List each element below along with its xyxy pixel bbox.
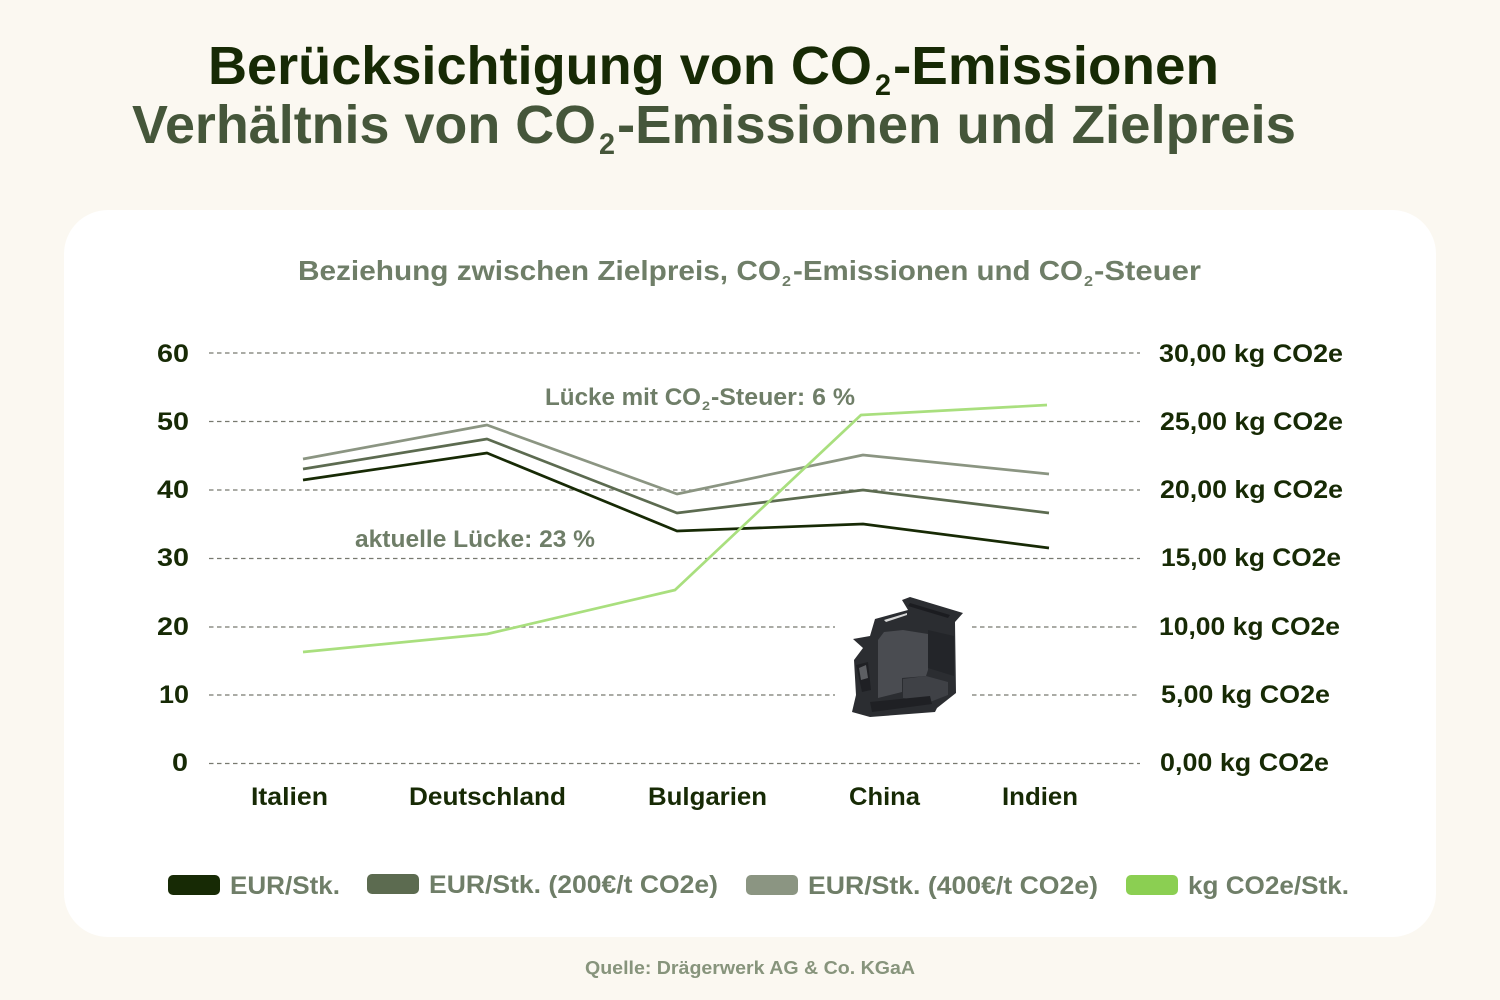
icon: dark plastic housing part <box>852 597 963 717</box>
chart heading: 2 <box>1084 273 1093 290</box>
left axis labels: 10 <box>159 681 189 709</box>
category labels: China <box>849 783 921 811</box>
title: Berücksichtigung von CO <box>208 36 872 96</box>
annotation: gap with CO2 tax: 2 <box>702 399 710 413</box>
category labels: Deutschland <box>409 783 566 811</box>
right axis labels: 0,00 kg CO2e <box>1160 749 1329 777</box>
right axis labels: 25,00 kg CO2e <box>1160 408 1343 436</box>
title: 2 <box>875 69 891 102</box>
right axis labels: 30,00 kg CO2e <box>1159 340 1343 368</box>
chart heading: 2 <box>782 273 791 290</box>
left axis labels: 0 <box>172 749 188 777</box>
right axis labels: 20,00 kg CO2e <box>1160 476 1343 504</box>
source note: Quelle: Drägerwerk AG & Co. KGaA <box>585 958 915 978</box>
line: EUR/Stk. (200€/t CO2e) <box>303 439 1049 513</box>
subtitle heading: -Emissionen und Zielpreis <box>617 95 1296 155</box>
chart heading <box>298 255 1201 290</box>
subtitle heading <box>132 95 1296 161</box>
chart heading: -Steuer <box>1094 255 1201 286</box>
legend item: EUR/Stk.: EUR/Stk. <box>230 872 340 900</box>
annotation: gap with CO2 tax <box>545 384 855 413</box>
left axis labels: 20 <box>157 613 189 641</box>
legend item: kg CO2e/Stk.: kg CO2e/Stk. <box>1188 872 1349 900</box>
left axis labels: 50 <box>157 408 189 436</box>
category labels: Italien <box>251 783 328 811</box>
left axis labels <box>157 340 189 777</box>
line: kg CO2e/Stk. <box>303 405 1047 652</box>
right axis labels: 10,00 kg CO2e <box>1159 613 1340 641</box>
chart heading: -Emissionen und CO <box>793 255 1083 286</box>
legend item: EUR/Stk. 400: EUR/Stk. (400€/t CO2e) <box>808 872 1098 900</box>
category labels <box>251 783 1078 811</box>
line: EUR/Stk. <box>303 453 1049 548</box>
line chart <box>157 340 1343 811</box>
right axis labels: 5,00 kg CO2e <box>1161 681 1330 709</box>
legend item: EUR/Stk. 200: EUR/Stk. (200€/t CO2e) <box>429 871 718 899</box>
annotation: gap with CO2 tax: Lücke mit CO <box>545 384 701 411</box>
subtitle heading: Verhältnis von CO <box>132 95 596 155</box>
panel: chart card <box>64 210 1436 937</box>
annotation: gap with CO2 tax: -Steuer: 6 % <box>711 384 855 411</box>
left axis labels: 30 <box>157 544 189 572</box>
annotation: current gap: aktuelle Lücke: 23 % <box>355 526 595 553</box>
subtitle heading: 2 <box>599 128 615 161</box>
chart heading: Beziehung zwischen Zielpreis, CO <box>298 255 781 286</box>
right axis labels: 15,00 kg CO2e <box>1161 544 1341 572</box>
legend item: EUR/Stk. <box>168 872 340 900</box>
right axis labels <box>1159 340 1343 777</box>
category labels: Indien <box>1002 783 1078 811</box>
line: EUR/Stk. (400€/t CO2e) <box>303 425 1049 494</box>
title <box>208 36 1219 102</box>
legend <box>168 871 1349 900</box>
title: -Emissionen <box>893 36 1219 96</box>
left axis labels: 60 <box>157 340 189 368</box>
legend item: kg CO2e/Stk. <box>1126 872 1349 900</box>
category labels: Bulgarien <box>648 783 767 811</box>
left axis labels: 40 <box>157 476 189 504</box>
